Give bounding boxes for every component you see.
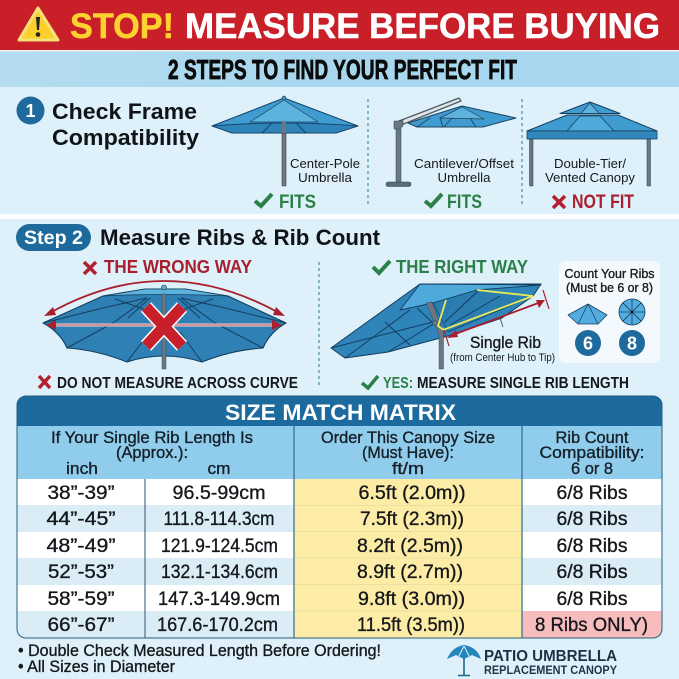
row 48-49: 8.2ft (2.5m))	[357, 536, 463, 557]
brand logo: REPLACEMENT CANOPY	[484, 663, 617, 677]
icon: wrong way umbrella	[43, 285, 286, 369]
step 2 heading: Measure Ribs & Rib Count	[100, 225, 380, 250]
row 48-49	[46, 536, 628, 557]
row 58-59: 6/8 Ribs	[556, 589, 628, 610]
row 66-67	[48, 615, 648, 636]
column header: rib count: Compatibility:	[540, 444, 644, 462]
callout: count your ribs	[559, 261, 660, 363]
icon: right way umbrella	[331, 284, 541, 369]
panel: step 2 measure ribs	[16, 224, 660, 392]
row 44-45: 44”-45”	[46, 509, 116, 530]
label: cantilever umbrella: Umbrella	[438, 170, 491, 185]
row 38-39: 96.5-99cm	[172, 483, 266, 504]
row 38-39	[48, 483, 628, 504]
step 1 heading: Compatibility	[52, 125, 199, 150]
not fit	[553, 192, 634, 213]
icon: logo umbrella	[447, 645, 481, 676]
row 38-39: 38”-39”	[48, 483, 114, 504]
row 58-59: 9.8ft (3.0m))	[358, 589, 465, 610]
column header: canopy size: Order This Canopy Size	[321, 429, 495, 447]
badge: six: 6	[583, 334, 593, 354]
label: center-pole umbrella	[290, 156, 360, 185]
label: single rib	[450, 333, 555, 364]
step 1 heading	[52, 99, 199, 150]
row 44-45: 7.5ft (2.3m))	[360, 509, 464, 530]
column header: rib count: Rib Count	[556, 429, 629, 447]
icon: big red x	[146, 307, 182, 346]
icon: eight rib canopy	[619, 299, 645, 325]
column header: canopy size: (Must Have):	[362, 444, 454, 462]
row 44-45: 6/8 Ribs	[556, 509, 628, 530]
title: measure before buying: MEASURE BEFORE BUYING	[185, 7, 660, 46]
row 48-49: 121.9-124.5cm	[161, 536, 278, 557]
row 44-45	[46, 509, 628, 530]
label: double-tier canopy: Double-Tier/	[554, 156, 626, 171]
warning: do not measure across curve: DO NOT MEASURE ACROSS CURVE	[57, 375, 298, 392]
brand logo	[447, 645, 617, 677]
label: double-tier canopy	[545, 156, 636, 185]
confirmation: measure single rib length: MEASURE SINGLE RIB LENGTH	[417, 375, 629, 392]
row 66-67: 11.5ft (3.5m))	[357, 615, 465, 636]
title banner	[0, 0, 679, 50]
single rib arrow	[444, 290, 549, 346]
footnotes: • All Sizes in Diameter	[18, 658, 175, 676]
step 2 badge: Step 2	[24, 227, 83, 249]
row 66-67: 8 Ribs ONLY)	[535, 615, 648, 636]
label: cantilever umbrella: Cantilever/Offset	[414, 156, 514, 171]
row 38-39: 6.5ft (2.0m))	[358, 483, 466, 504]
subtitle band	[0, 52, 679, 87]
step 1 badge: 1	[25, 101, 36, 121]
size match matrix table	[17, 396, 662, 638]
confirmation: measure single rib length: YES:	[383, 375, 413, 392]
column header: rib count	[540, 429, 644, 478]
icon: cantilever umbrella	[386, 98, 516, 186]
row 66-67: 66”-67”	[48, 615, 114, 636]
brand logo: PATIO UMBRELLA	[484, 648, 617, 665]
row 66-67: 167.6-170.2cm	[157, 615, 278, 636]
row 52-53: 6/8 Ribs	[556, 562, 628, 583]
row 58-59: 147.3-149.9cm	[158, 589, 280, 610]
label: double-tier canopy: Vented Canopy	[545, 170, 636, 185]
subtitle: 2 STEPS TO FIND YOUR PERFECT FIT	[168, 54, 517, 85]
row 58-59	[48, 589, 628, 610]
label: center-pole umbrella: Center-Pole	[290, 156, 360, 171]
step 2 badge	[16, 224, 91, 251]
icon: warning triangle	[19, 8, 58, 40]
label: single rib: Single Rib	[470, 333, 541, 352]
row 52-53	[48, 562, 628, 583]
column header: rib length: inch	[66, 460, 98, 478]
column header: rib count: 6 or 8	[571, 460, 613, 478]
icon: six rib canopy	[568, 304, 607, 324]
callout: count your ribs: (Must be 6 or 8)	[566, 281, 653, 295]
fits: center-pole	[255, 192, 316, 213]
badge: eight: 8	[627, 334, 637, 354]
table title: SIZE MATCH MATRIX	[225, 400, 456, 425]
row 48-49: 48”-49”	[46, 536, 116, 557]
row 52-53: 52”-53”	[48, 562, 114, 583]
row 52-53: 8.9ft (2.7m))	[357, 562, 463, 583]
fits: cantilever: FITS	[447, 192, 482, 213]
fits: center-pole: FITS	[279, 192, 316, 213]
footnotes	[18, 642, 381, 676]
label: center-pole umbrella: Umbrella	[298, 170, 353, 185]
column header: rib length: cm	[208, 460, 230, 478]
footnotes: • Double Check Measured Length Before Ordering!	[18, 642, 381, 660]
fits: cantilever	[425, 192, 482, 213]
wrong way heading: THE WRONG WAY	[104, 257, 252, 277]
label: cantilever umbrella	[414, 156, 514, 185]
not fit: NOT FIT	[572, 192, 634, 213]
row 52-53: 132.1-134.6cm	[161, 562, 278, 583]
row 58-59: 58”-59”	[48, 589, 114, 610]
column header: rib length: (Approx.):	[116, 444, 188, 462]
column header: rib length	[51, 429, 253, 478]
right way heading: THE RIGHT WAY	[396, 257, 528, 277]
column header: canopy size	[321, 429, 495, 478]
panel: step 1 frame compatibility	[0, 87, 679, 214]
icon: center-pole umbrella	[212, 96, 358, 186]
callout: count your ribs: Count Your Ribs	[564, 267, 654, 281]
step 1 heading: Check Frame	[52, 99, 197, 124]
label: single rib: (from Center Hub to Tip)	[450, 352, 555, 364]
step 1 badge	[16, 96, 44, 124]
column header: rib length: If Your Single Rib Length Is	[51, 429, 253, 447]
measurement arrows wrong	[44, 281, 285, 330]
row 38-39: 6/8 Ribs	[556, 483, 628, 504]
yellow rib highlight	[438, 290, 533, 330]
row 44-45: 111.8-114.3cm	[164, 509, 274, 530]
title: stop: STOP!	[70, 7, 174, 46]
icon: double-tier canopy	[527, 102, 657, 186]
row 48-49: 6/8 Ribs	[556, 536, 628, 557]
column header: canopy size: ft/m	[392, 460, 424, 478]
